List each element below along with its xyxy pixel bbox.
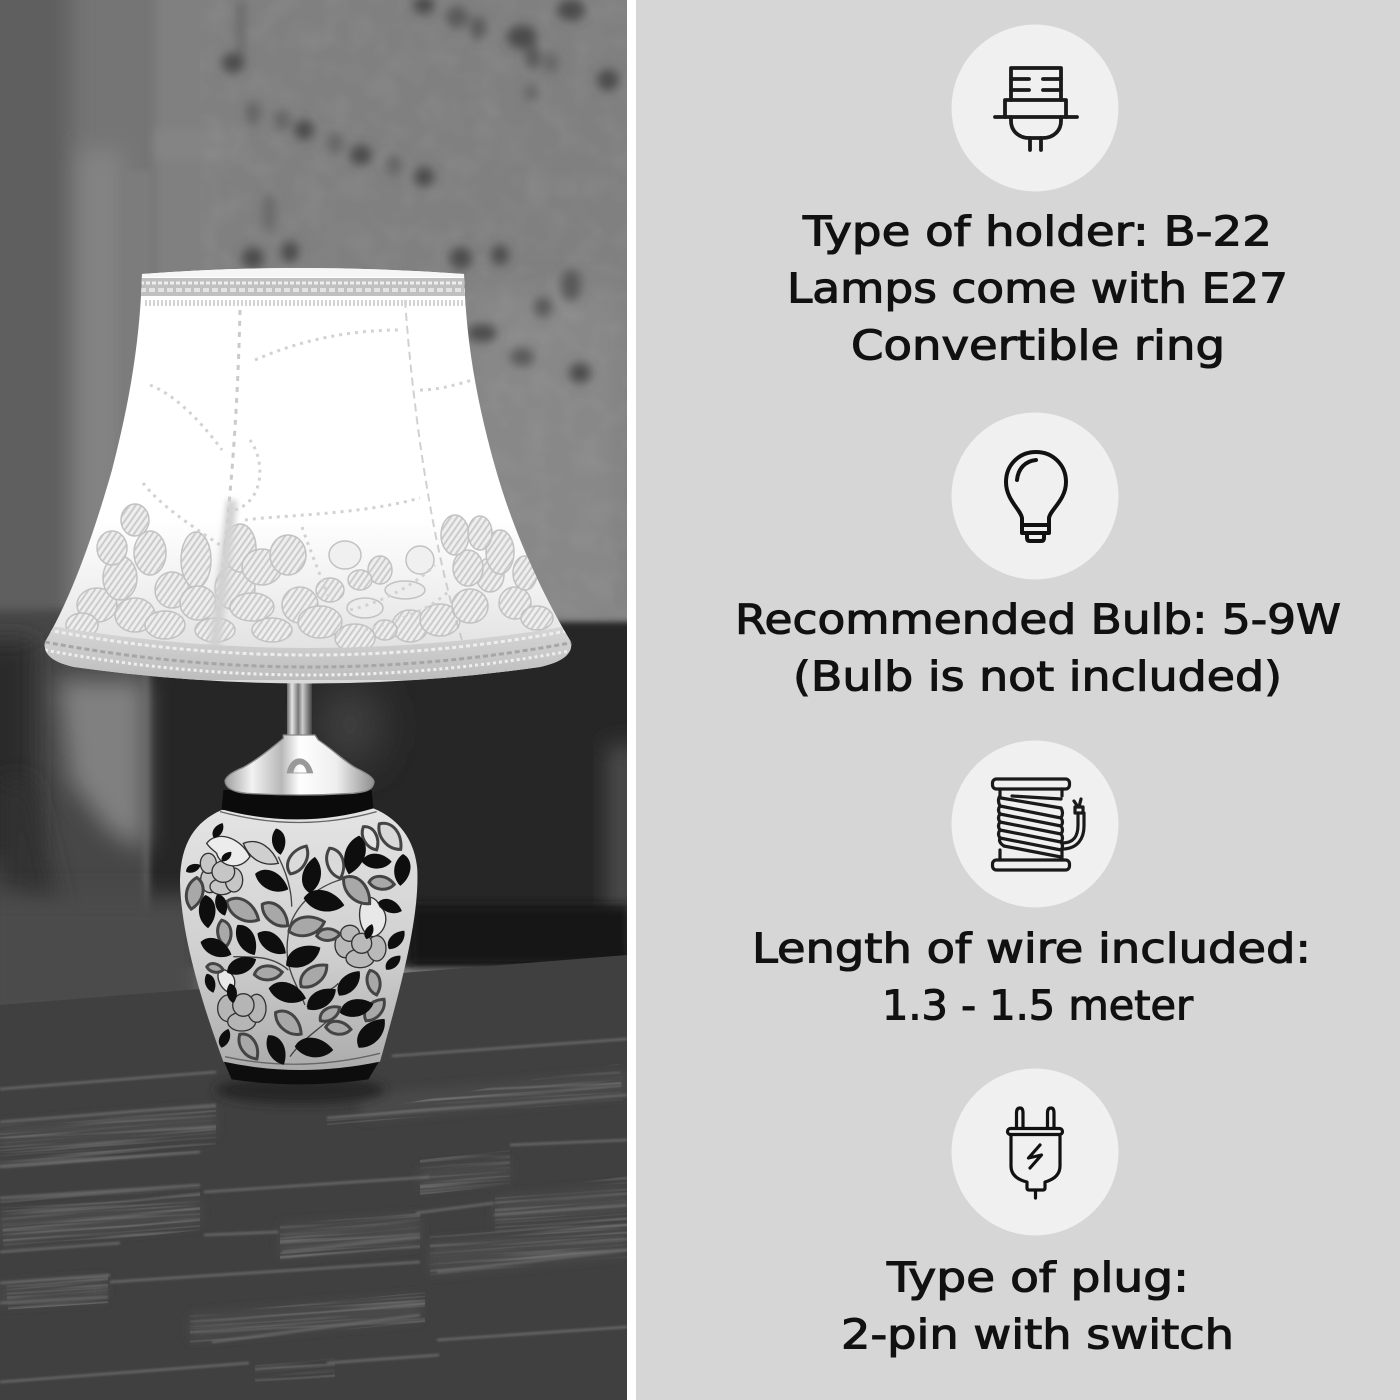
icon: bulb holder <box>995 68 1077 150</box>
bottom trim band <box>30 624 590 680</box>
text: bulb details: Recommended Bulb: 5-9W <box>735 596 1341 644</box>
icon circle: bulb <box>952 412 1118 580</box>
wooden table <box>0 955 640 1400</box>
spec 1: holder <box>787 24 1288 370</box>
top trim band <box>140 278 470 296</box>
rim lines <box>220 812 380 1064</box>
spec 2: bulb <box>735 412 1341 700</box>
wood streaks <box>0 1039 627 1382</box>
ceramic vase <box>180 735 417 1084</box>
shade fabric <box>45 268 571 684</box>
blurred wall pattern <box>222 0 619 383</box>
metal cap <box>225 735 374 795</box>
text: holder details: Convertible ring <box>851 322 1225 370</box>
embroidered scallops <box>66 504 553 652</box>
light painted leaves <box>184 818 408 1063</box>
painted stems <box>233 857 357 1057</box>
cap ornament <box>287 758 313 773</box>
text: bulb details: (Bulb is not included) <box>793 652 1282 700</box>
lamp stem <box>287 683 312 734</box>
vase foot <box>223 1060 380 1084</box>
icon: light bulb <box>1006 452 1066 541</box>
dotted paisley embroidery <box>143 330 490 630</box>
icon circle: holder <box>952 24 1118 192</box>
text: holder details <box>787 208 1288 370</box>
spec 4: plug <box>841 1068 1234 1358</box>
text: wire details: Length of wire included: <box>752 924 1311 972</box>
text: plug details: 2-pin with switch <box>841 1310 1234 1358</box>
blurred room background <box>0 0 627 1005</box>
lamp shade <box>30 267 590 684</box>
vase body <box>180 808 417 1070</box>
icon: wire spool <box>992 779 1084 870</box>
text: wire details <box>752 924 1311 1030</box>
icon: electric plug <box>1008 1108 1062 1198</box>
icon circle: plug <box>952 1068 1118 1236</box>
grain patches <box>0 1072 627 1340</box>
spec 3: wire <box>752 740 1311 1030</box>
shade seams <box>214 300 462 650</box>
text: plug details <box>841 1254 1234 1358</box>
flower: right <box>335 897 386 968</box>
dark lower room <box>148 622 648 967</box>
wood grain texture <box>0 1064 627 1382</box>
text: holder details: Lamps come with E27 <box>787 264 1288 312</box>
icon circle: wire <box>952 740 1118 908</box>
panel: specifications background <box>636 0 1400 1400</box>
dark painted leaves <box>184 821 412 1068</box>
vase shadow <box>215 1076 385 1104</box>
dark neck band <box>222 790 373 819</box>
text: holder details: Type of holder: B-22 <box>802 208 1272 256</box>
panel: lamp photograph <box>0 0 648 1400</box>
flower motifs <box>200 836 386 1031</box>
flower: lower left <box>218 970 266 1031</box>
text: wire details: 1.3 - 1.5 meter <box>882 982 1193 1030</box>
flower: upper left <box>200 836 278 895</box>
text: bulb details <box>735 596 1341 700</box>
text: plug details: Type of plug: <box>886 1254 1189 1302</box>
